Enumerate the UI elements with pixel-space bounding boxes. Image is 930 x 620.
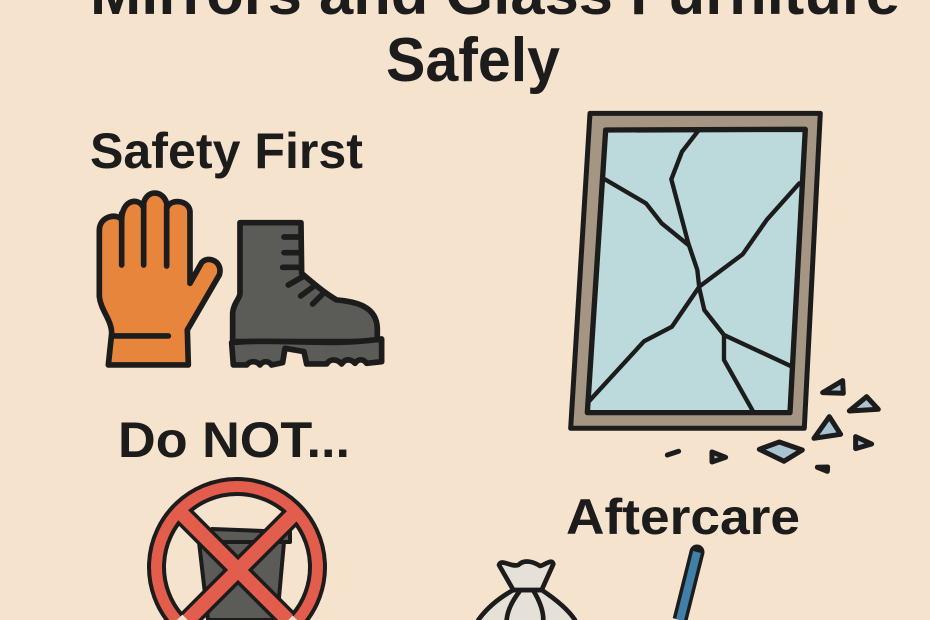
icon: work boot xyxy=(232,223,382,365)
mirror frame xyxy=(571,113,820,428)
glass shards xyxy=(667,381,878,471)
title xyxy=(90,0,900,95)
icon: trash bag xyxy=(478,561,575,620)
mirror glass xyxy=(587,129,805,413)
crack lines xyxy=(589,131,799,411)
title: Safely xyxy=(386,26,560,95)
prohibition ring and cross xyxy=(156,487,318,620)
heading: safety first: Safety First xyxy=(90,123,363,179)
heading: aftercare: Aftercare xyxy=(566,489,800,545)
illustration: broken mirror xyxy=(571,113,878,471)
bucket xyxy=(199,529,290,620)
icon: prohibited bucket xyxy=(156,487,318,620)
icon: orange glove xyxy=(99,193,220,365)
heading: do not: Do NOT... xyxy=(118,412,350,468)
icon: broom handle xyxy=(680,544,704,620)
